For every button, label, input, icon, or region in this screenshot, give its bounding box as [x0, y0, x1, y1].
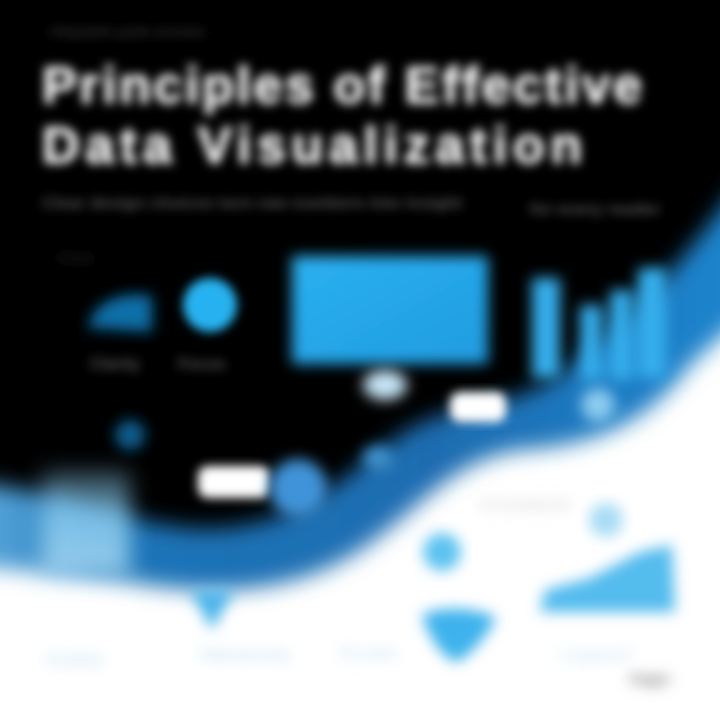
icon labels: Clarity — [90, 356, 140, 373]
subtitle: Clear design choices turn raw numbers into insight — [42, 195, 462, 212]
marker — [190, 590, 234, 630]
bar chart — [532, 268, 666, 380]
heart icon — [422, 609, 496, 662]
bottom captions: Hierarchy — [200, 647, 290, 664]
icon: circle — [183, 278, 237, 332]
bottom captions: Legend — [560, 647, 630, 664]
blue circle — [269, 459, 327, 517]
white pill left — [198, 466, 270, 498]
bottom captions: logo — [630, 671, 670, 688]
white pill right — [450, 392, 506, 422]
white lower area — [0, 260, 720, 720]
light blue circle — [423, 533, 461, 571]
title: Principles of Effective — [42, 57, 642, 115]
title — [42, 57, 642, 175]
bottom captions: Color — [45, 652, 105, 669]
subtitle — [42, 195, 660, 218]
section label: Charts — [58, 251, 93, 265]
icon labels — [90, 356, 225, 373]
icon: half circle — [88, 294, 152, 332]
bottom captions: Scale — [338, 645, 398, 662]
icon labels: Focus — [178, 356, 225, 373]
panel: blue chart — [292, 256, 488, 364]
connector blobs — [115, 370, 615, 470]
small blob — [589, 503, 623, 537]
small text above title: Infographic guide overview — [50, 24, 205, 39]
subtitle: for every reader — [530, 201, 660, 218]
left light column — [42, 470, 130, 575]
bottom captions — [45, 497, 670, 688]
blue wave band — [0, 170, 720, 590]
bottom captions: Context — [480, 497, 571, 514]
title: Data Visualization — [42, 117, 582, 175]
area chart — [540, 545, 675, 612]
